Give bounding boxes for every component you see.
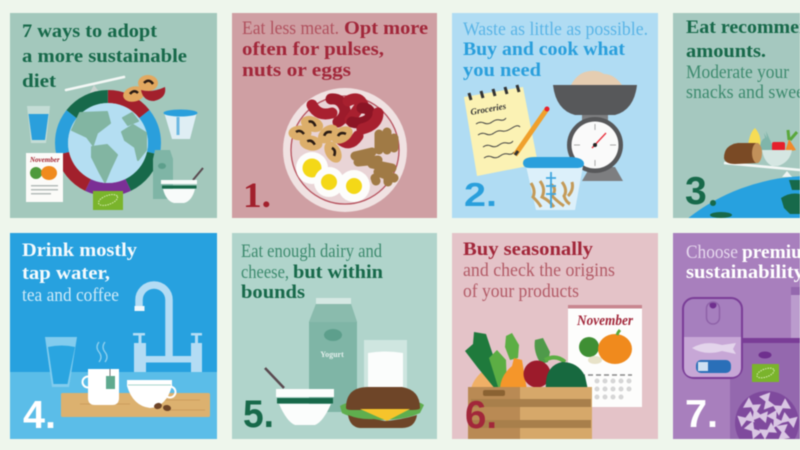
icon: bowl of pasta — [735, 391, 799, 440]
kidney beans — [312, 99, 378, 143]
panel: 1 eat less meat — [232, 13, 437, 218]
heading: buy seasonally: Buy seasonally — [463, 239, 594, 260]
heading: eat less meat: nuts or eggs — [242, 60, 351, 81]
panel: 2 waste as little as possible — [452, 13, 658, 218]
icon: pencil — [515, 106, 550, 155]
icon: grocery list: Groceries — [470, 101, 507, 117]
heading: eat enough dairy and cheese: but within — [293, 262, 383, 283]
black-eyed beans — [288, 113, 356, 166]
number 4: 4. — [23, 394, 56, 437]
heading: choose premium sustainability — [686, 242, 800, 283]
heading: waste as little as possible: you need — [463, 60, 541, 81]
heading: 7 ways to adopt a more sustainable diet — [22, 21, 187, 92]
chart: seven segment ring — [62, 96, 154, 190]
icon: organic label — [752, 364, 779, 382]
icon: food on scale — [724, 128, 797, 166]
eggs — [296, 152, 370, 202]
number 7: 7. — [685, 393, 718, 436]
heading: eat recommended amounts — [686, 17, 800, 103]
icon: balance plank — [724, 163, 800, 177]
heading: buy seasonally: of your products — [463, 281, 579, 302]
icon: glass of milk — [364, 340, 407, 389]
number 1: 1. — [243, 175, 271, 215]
icon: calendar — [26, 153, 63, 202]
icon: calendar: November — [29, 156, 60, 164]
panel: 6 buy seasonally — [452, 233, 658, 439]
heading: eat recommended amounts: amounts. — [686, 41, 766, 62]
heading: eat less meat: Eat less meat. — [242, 18, 339, 39]
heading: choose premium sustainability: sustainability — [686, 262, 800, 283]
icon: vegetables — [465, 332, 588, 390]
number 2: 2. — [464, 176, 497, 213]
icon: burger — [340, 387, 424, 428]
panel: 3 eat recommended amounts — [673, 13, 800, 218]
heading: eat recommended amounts: Moderate your — [686, 62, 790, 83]
heading: drink mostly tap water: tap water, — [22, 263, 110, 284]
heading: eat enough dairy and cheese: cheese, — [241, 262, 289, 283]
icon: yogurt carton: Yogurt — [320, 350, 344, 359]
nuts — [355, 132, 394, 182]
counter top — [10, 372, 217, 439]
icon: wooden board — [61, 393, 210, 417]
icon: bowl and spoon — [161, 168, 203, 203]
panel: 7 choose premium sustainability — [673, 233, 800, 440]
icon: cereal bowl — [265, 368, 334, 425]
icon: balance beam — [66, 77, 124, 96]
panel: intro, 7 ways — [10, 13, 217, 218]
heading: eat less meat: often for pulses, — [242, 39, 384, 60]
icon: yogurt carton — [153, 150, 173, 199]
heading: 7 ways to adopt a more sustainable diet: a more sustainable — [22, 46, 187, 67]
heading: drink mostly tap water: Drink mostly — [22, 240, 138, 261]
panel: 4 drink mostly tap water — [10, 233, 217, 439]
icon: globe segment — [688, 176, 800, 218]
heading: eat enough dairy and cheese: bounds — [241, 282, 305, 303]
icon: food container — [523, 157, 584, 210]
heading: 7 ways to adopt a more sustainable diet: 7 ways to adopt — [22, 21, 158, 42]
icon: tea mug — [82, 342, 119, 405]
icon: november calendar — [568, 305, 642, 407]
number 3: 3 — [685, 170, 707, 213]
icon: wooden crate — [468, 387, 592, 439]
heading: choose premium sustainability: Choose — [686, 242, 738, 263]
icon: measuring cup — [164, 110, 198, 139]
heading: buy seasonally: and check the origins — [463, 260, 615, 281]
icon: plate of pulses, nuts and eggs — [283, 88, 407, 212]
icon: sardine tin — [683, 298, 742, 378]
icon: kitchen scale — [553, 71, 637, 181]
number 5: 5. — [243, 393, 274, 436]
heading: drink mostly tap water — [22, 240, 138, 306]
heading: eat enough dairy and cheese — [241, 241, 383, 303]
icon: coffee beans — [153, 402, 171, 412]
icon: november calendar: November — [576, 313, 633, 329]
icon: tap — [133, 285, 202, 372]
heading: eat less meat: Opt more — [344, 18, 428, 39]
icon: yogurt carton — [309, 298, 357, 412]
icon: coffee cup — [127, 380, 176, 408]
heading: eat enough dairy and cheese: Eat enough dairy and — [241, 241, 382, 262]
heading: drink mostly tap water: tea and coffee — [22, 285, 119, 306]
heading: waste as little as possible: Buy and cook what — [463, 39, 626, 60]
icon: organic label — [93, 191, 123, 210]
icon: box — [730, 287, 800, 439]
icon: beans — [121, 75, 165, 104]
panel: 5 dairy and cheese — [232, 233, 437, 439]
heading: buy seasonally — [463, 239, 615, 302]
icon: glass of water — [27, 106, 50, 143]
heading: waste as little as possible — [463, 19, 648, 81]
icon: globe — [68, 103, 148, 183]
heading: waste as little as possible: Waste as little as possible. — [463, 19, 648, 40]
icon: grocery list — [464, 85, 538, 176]
heading: eat less meat — [242, 18, 428, 81]
number 6: 6. — [465, 394, 497, 437]
icon: glass of water — [45, 337, 77, 387]
heading: 7 ways to adopt a more sustainable diet: diet — [22, 71, 57, 92]
